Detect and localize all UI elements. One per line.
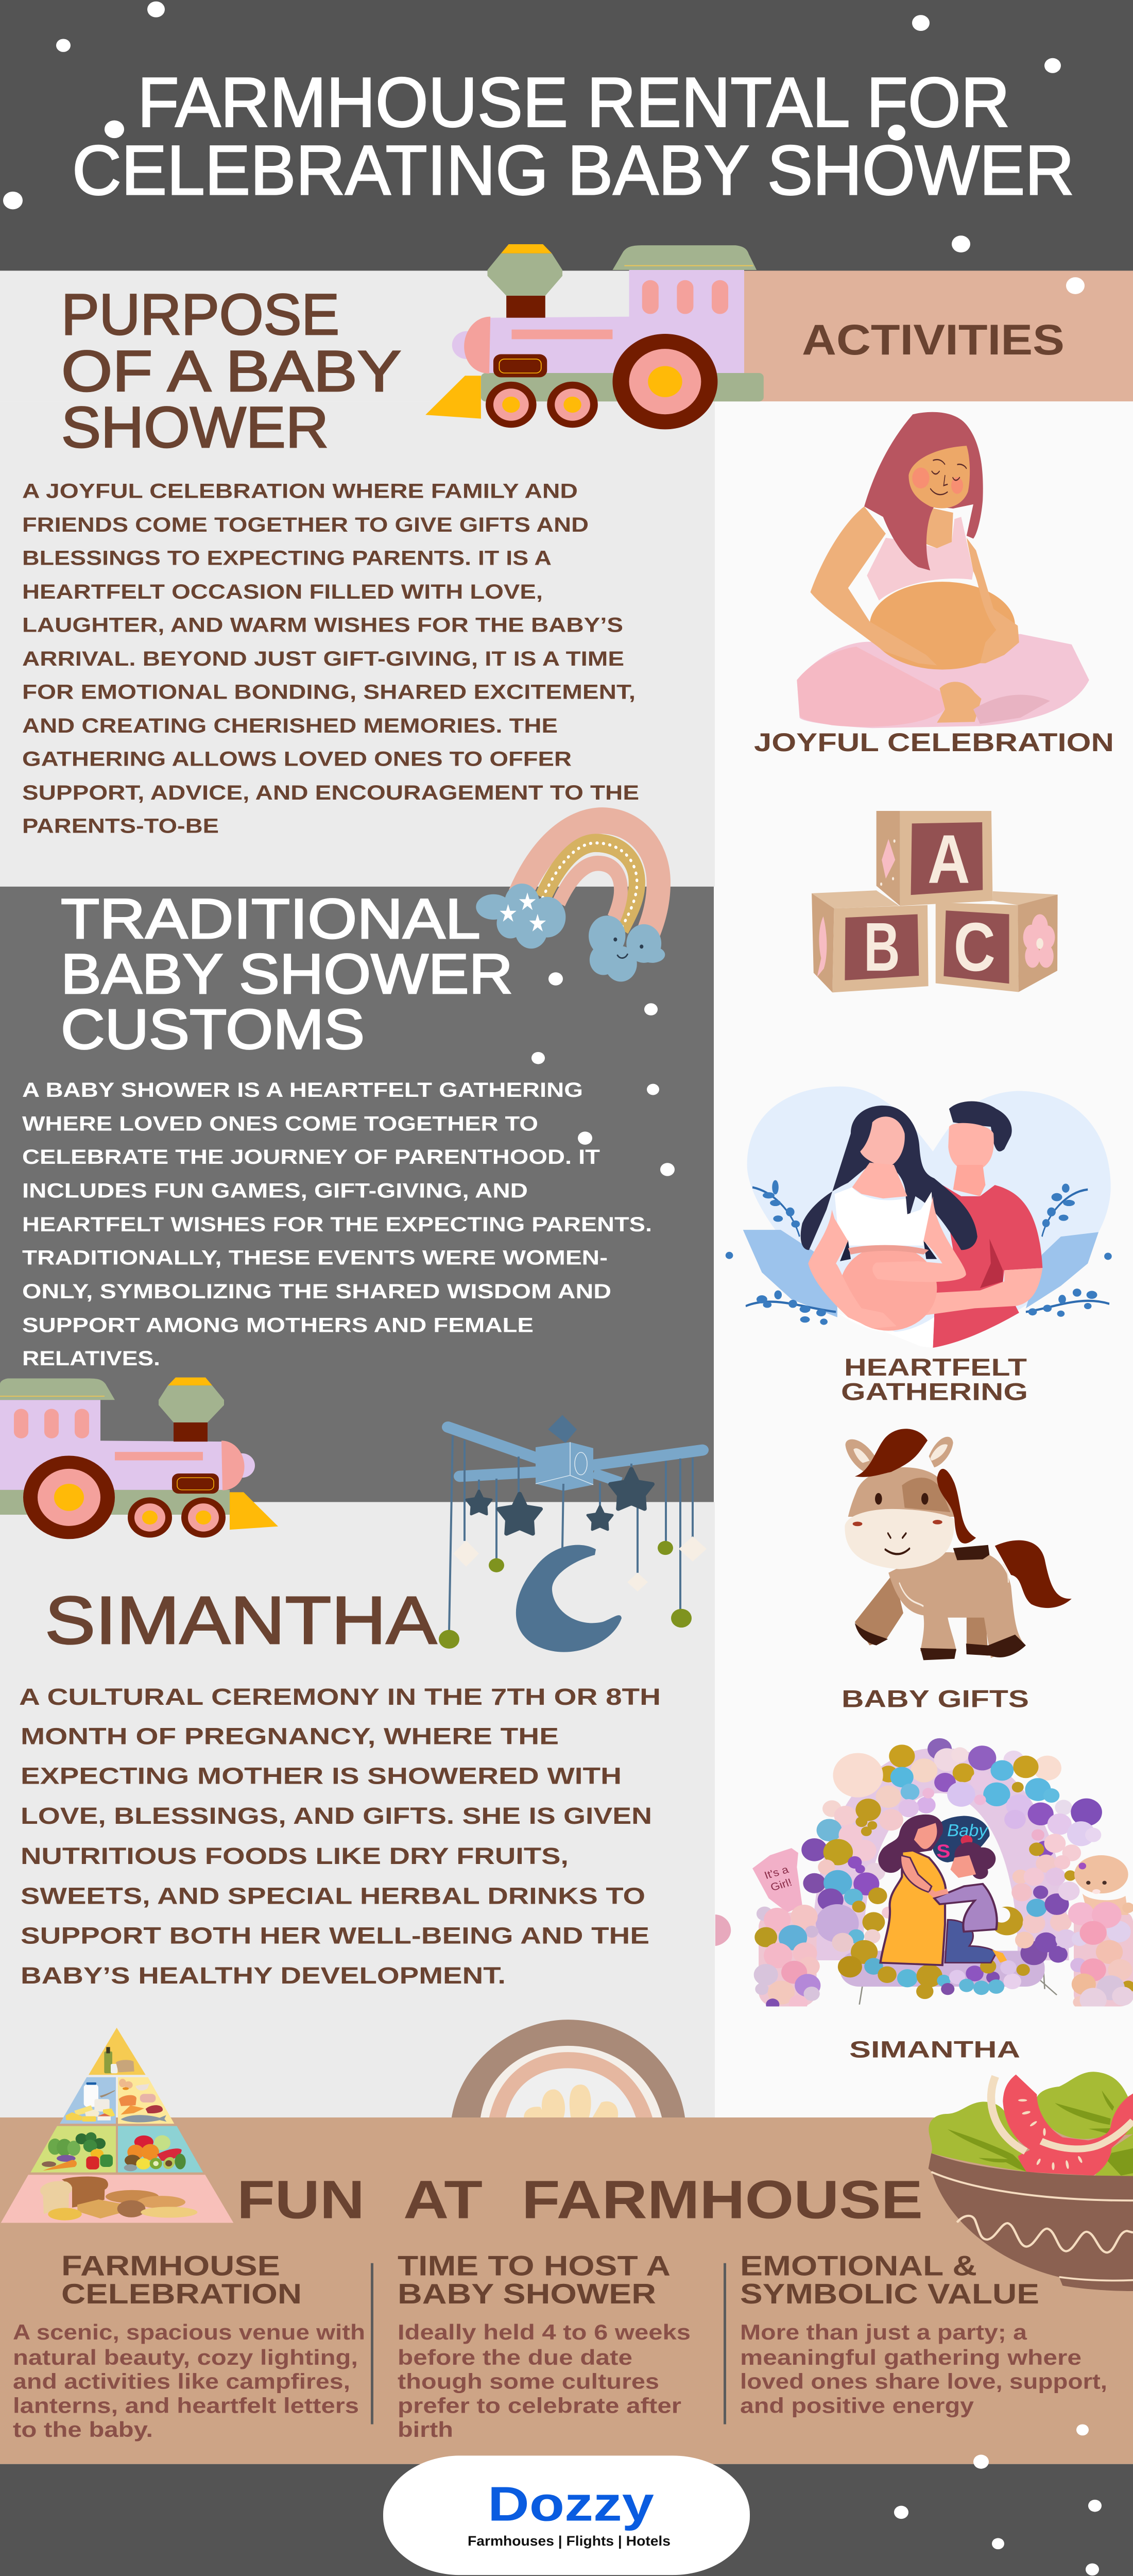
label: simantha: SIMANTHA [849,2037,1020,2063]
illustration: abc blocks [812,811,1058,992]
text block: customs description: ONLY, SYMBOLIZING THE SHARED WISDOM AND [22,1280,611,1303]
text block: customs description: A BABY SHOWER IS A HEARTFELT GATHERING [22,1078,583,1101]
column: emotional and symbolic value: More than just a party; a [740,2320,1027,2344]
illustration: toy horse [845,1429,1072,1660]
logo wordmark: Dozzy [488,2477,654,2532]
text block: purpose description: ARRIVAL. BEYOND JUST GIFT-GIVING, IT IS A TIME [22,647,624,670]
logo tagline: Farmhouses | Flights | Hotels [468,2533,671,2549]
text block: customs description: INCLUDES FUN GAMES, GIFT-GIVING, AND [22,1179,528,1202]
text block: simantha description: MONTH OF PREGNANCY, WHERE THE [21,1724,559,1750]
column: time to host a baby shower: TIME TO HOST A [398,2250,671,2282]
label: heartfelt gathering [841,1353,1028,1405]
column: emotional and symbolic value: meaningful gathering where [740,2346,1082,2370]
panel: activities heading band [744,270,1133,401]
column: emotional and symbolic value: loved ones share love, support, [740,2369,1107,2394]
panel: traditional baby shower customs [0,887,714,1502]
text block: customs description: RELATIVES. [22,1347,160,1370]
text block: purpose description: GATHERING ALLOWS LOVED ONES TO OFFER [22,747,572,770]
column: emotional and symbolic value: and positive energy [740,2394,974,2418]
text block: purpose description: BLESSINGS TO EXPECTING PARENTS. IT IS A [22,546,552,569]
heading: fun at farmhouse: FUN [237,2170,365,2230]
column: time to host a baby shower: though some cultures [398,2369,659,2394]
text block: customs description: HEARTFELT WISHES FOR THE EXPECTING PARENTS. [22,1213,652,1236]
heading: traditional customs: TRADITIONAL [61,888,480,951]
icon: brown rainbow arch [452,2020,685,2117]
logo badge: dozzy [383,2455,750,2575]
icon: food pyramid [1,2028,233,2223]
divider line one [371,2263,373,2424]
heading: simantha: SIMANTHA [45,1583,437,1658]
title [72,63,1074,210]
illustration: abc blocks: C [954,908,995,986]
panel: simantha [0,1502,715,2117]
label: baby gifts: BABY GIFTS [842,1685,1029,1713]
text block: simantha description [19,1684,661,1989]
column: farmhouse celebration: A scenic, spacious venue with [13,2320,365,2344]
illustration: balloon arch with couple: S [936,1841,950,1862]
icon: rainbow with clouds: ★ [500,902,517,925]
heading: purpose [61,282,401,460]
icon: salad bowl [929,2072,1133,2291]
title: FARMHOUSE RENTAL FOR [138,63,1010,142]
heading: fun at farmhouse: FARMHOUSE [522,2170,923,2230]
illustration: abc blocks: A [928,820,970,897]
text block: simantha description: A CULTURAL CEREMONY IN THE 7TH OR 8TH [19,1684,661,1710]
illustration: balloon arch with couple: Baby [947,1821,989,1840]
text block: simantha description: EXPECTING MOTHER IS SHOWERED WITH [21,1764,622,1789]
illustration: balloon arch with couple [715,1738,1133,2012]
text block: purpose description: PARENTS-TO-BE [22,814,219,837]
column: time to host a baby shower: BABY SHOWER [398,2278,656,2310]
text block: simantha description: LOVE, BLESSINGS, AND GIFTS. SHE IS GIVEN [21,1803,652,1829]
label: joyful celebration: JOYFUL CELEBRATION [754,728,1114,757]
text block: customs description: WHERE LOVED ONES COME TOGETHER TO [22,1112,538,1135]
text block: simantha description: SWEETS, AND SPECIAL HERBAL DRINKS TO [21,1883,645,1909]
icon: rainbow with clouds: ★ [519,890,536,914]
illustration: expecting couple in heart [726,1087,1112,1348]
icon: rainbow with clouds: ★ [529,911,546,935]
heading: traditional customs: BABY SHOWER [61,943,513,1006]
column: time to host a baby shower [398,2250,691,2442]
divider line two [724,2263,726,2424]
label: heartfelt gathering: GATHERING [841,1378,1028,1405]
heading: purpose: SHOWER [61,395,329,460]
icon: toy train lower [0,1378,278,1539]
illustration: pregnant woman [797,412,1089,728]
icon: baby mobile [439,1415,707,1652]
panel: purpose of a baby shower [0,270,744,887]
text block: purpose description: FOR EMOTIONAL BONDING, SHARED EXCITEMENT, [22,680,636,703]
heading: purpose: OF A BABY [61,339,401,404]
heading: activities: ACTIVITIES [802,315,1065,364]
column: emotional and symbolic value: EMOTIONAL & [740,2250,977,2282]
text block: purpose description: LAUGHTER, AND WARM WISHES FOR THE BABY’S [22,613,623,636]
text block: customs description: SUPPORT AMONG MOTHERS AND FEMALE [22,1313,534,1336]
illustration: balloon arch with couple: Girl! [769,1876,794,1893]
illustration: abc blocks: B [864,908,900,986]
heading: fun at farmhouse [237,2170,923,2230]
text block: customs description [22,1078,652,1370]
text block: purpose description [22,479,639,837]
text block: simantha description: SUPPORT BOTH HER WELL-BEING AND THE [21,1923,649,1949]
text block: purpose description: AND CREATING CHERISHED MEMORIES. THE [22,714,558,737]
heading: traditional customs [61,888,513,1061]
text block: customs description: TRADITIONALLY, THESE EVENTS WERE WOMEN- [22,1246,608,1269]
text block: purpose description: FRIENDS COME TOGETHER TO GIVE GIFTS AND [22,513,589,536]
icon: rainbow with clouds [476,821,665,981]
panel: right activities column [715,401,1133,2117]
heading: fun at farmhouse: AT [403,2170,483,2230]
text block: purpose description: HEARTFELT OCCASION FILLED WITH LOVE, [22,580,543,603]
panel: fun at farmhouse band [0,2117,1133,2464]
text block: simantha description: BABY’S HEALTHY DEVELOPMENT. [21,1963,506,1989]
text block: customs description: CELEBRATE THE JOURNEY OF PARENTHOOD. IT [22,1145,600,1168]
panel: header [0,0,1133,270]
column: emotional and symbolic value [740,2250,1107,2418]
column: time to host a baby shower: Ideally held 4 to 6 weeks [398,2320,691,2344]
column: farmhouse celebration [13,2250,365,2442]
heading: traditional customs: CUSTOMS [61,998,365,1061]
heading: purpose: PURPOSE [61,282,339,347]
text block: simantha description: NUTRITIOUS FOODS LIKE DRY FRUITS, [21,1843,569,1870]
column: emotional and symbolic value: SYMBOLIC VALUE [740,2278,1039,2310]
illustration: balloon arch with couple: It's a [763,1863,791,1882]
column: time to host a baby shower: birth [398,2418,453,2442]
column: farmhouse celebration: FARMHOUSE [61,2250,280,2282]
column: time to host a baby shower: before the due date [398,2346,632,2370]
column: farmhouse celebration: natural beauty, cozy lighting, [13,2346,358,2370]
column: farmhouse celebration: CELEBRATION [61,2278,302,2310]
icon: toy train top [425,244,764,429]
column: farmhouse celebration: lanterns, and heartfelt letters [13,2394,359,2418]
column: farmhouse celebration: to the baby. [13,2418,153,2442]
text block: purpose description: SUPPORT, ADVICE, AND ENCOURAGEMENT TO THE [22,781,639,804]
column: farmhouse celebration: and activities like campfires, [13,2369,350,2394]
text block: purpose description: A JOYFUL CELEBRATION WHERE FAMILY AND [22,479,578,502]
label: heartfelt gathering: HEARTFELT [844,1353,1027,1381]
panel: footer [0,2464,1133,2576]
column: time to host a baby shower: prefer to celebrate after [398,2394,681,2418]
